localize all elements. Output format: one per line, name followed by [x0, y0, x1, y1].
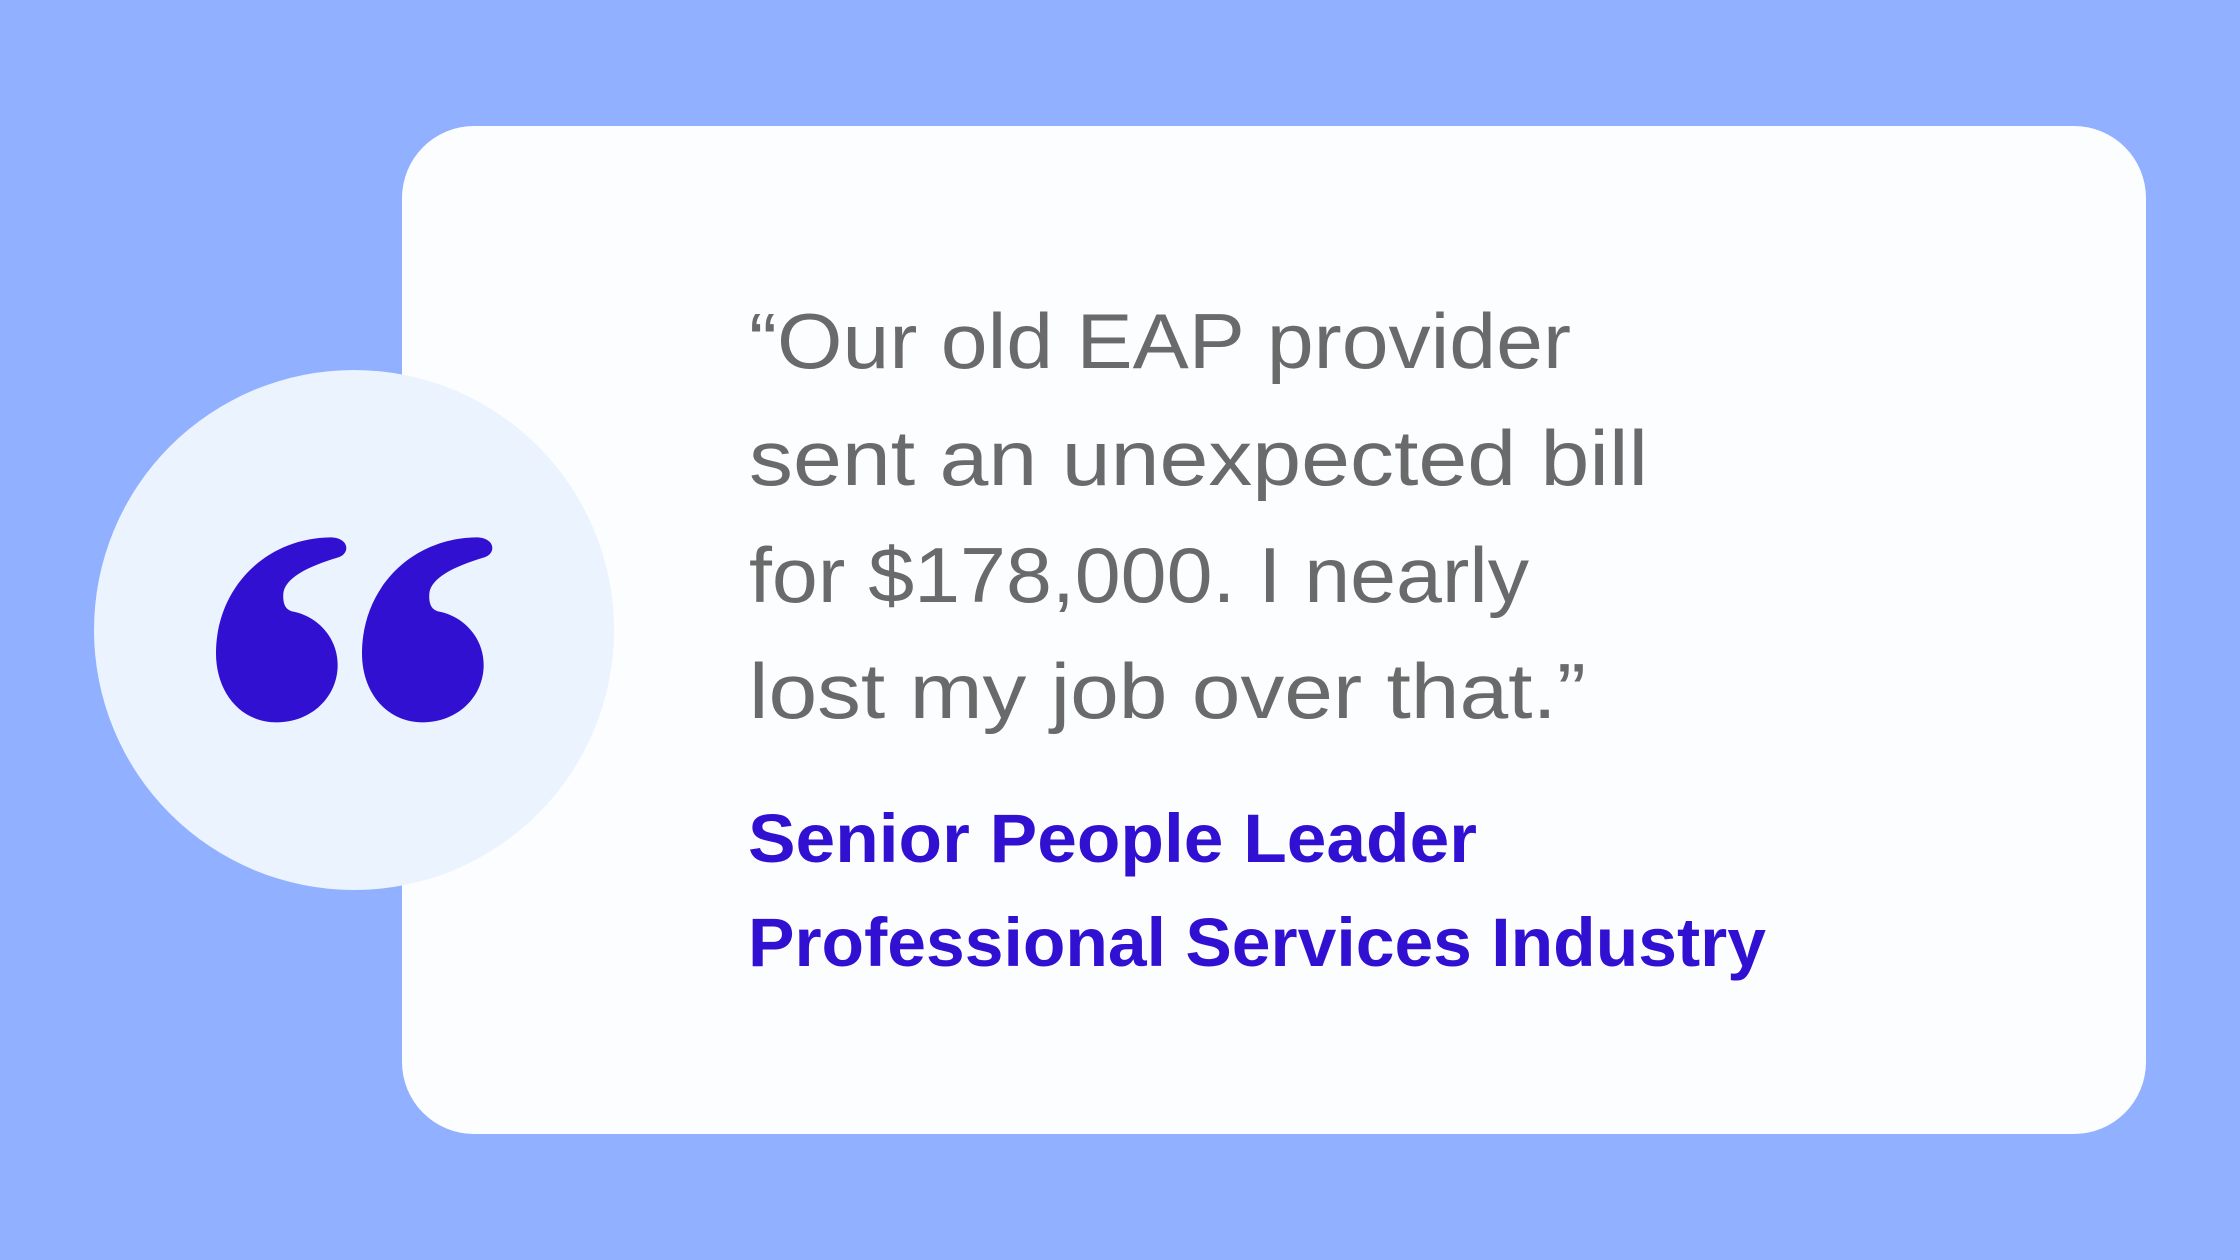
- attribution: Professional Services Industry: [748, 904, 1766, 981]
- panel: white quote card: [402, 126, 2146, 1134]
- quote text: lost my job over that.”: [749, 647, 1586, 735]
- attribution: [748, 800, 1766, 981]
- quote text: “Our old EAP provider: [749, 297, 1571, 385]
- attribution: Senior People Leader: [748, 800, 1477, 877]
- quote text: [749, 297, 1648, 735]
- quote text: for $178,000. I nearly: [749, 531, 1529, 619]
- quote text: sent an unexpected bill: [749, 414, 1648, 502]
- icon: quotation mark badge: [94, 370, 614, 890]
